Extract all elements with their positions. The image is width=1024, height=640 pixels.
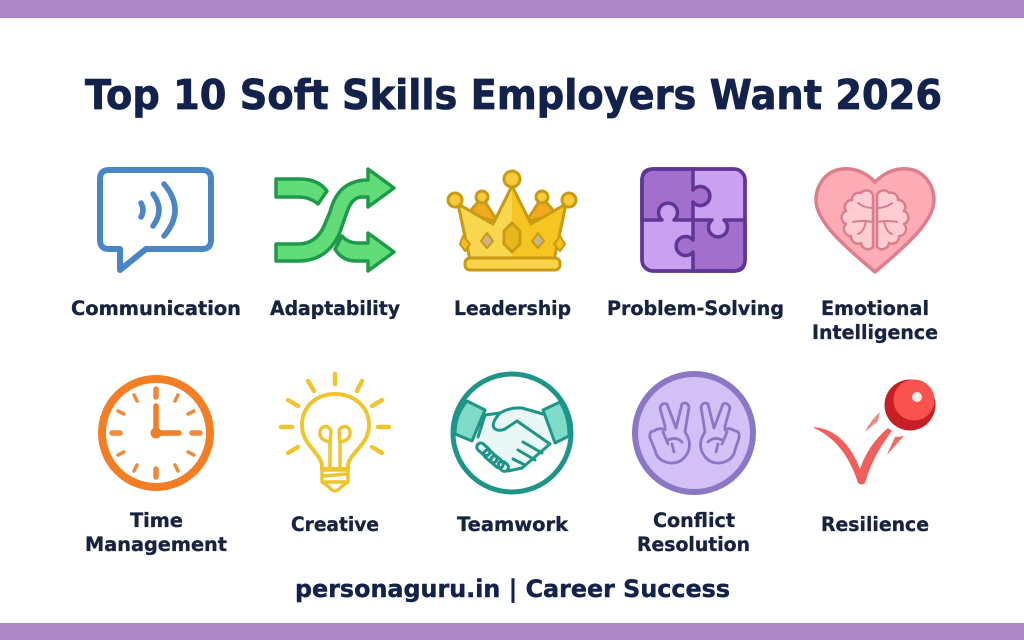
label: Creative: Creative xyxy=(291,513,379,536)
bottom band xyxy=(0,623,1024,640)
label: Conflict Resolution xyxy=(637,509,750,556)
icon: puzzle pieces xyxy=(642,169,745,271)
label: Emotional Intelligence: Emotional xyxy=(821,297,929,320)
label: Communication: Communication xyxy=(71,297,241,320)
label: Conflict Resolution: Resolution xyxy=(637,533,750,556)
icon: gold crown xyxy=(448,171,576,270)
label: Adaptability: Adaptability xyxy=(270,297,400,320)
icon: speech bubble with sound waves xyxy=(100,170,211,270)
label: Time Management: Time xyxy=(130,509,183,532)
label: Time Management: Management xyxy=(85,533,227,556)
footer: personaguru.in | Career Success xyxy=(295,575,730,603)
title: Top 10 Soft Skills Employers Want 2026 xyxy=(85,71,942,119)
icon: shuffle arrows xyxy=(276,169,394,271)
icon: peace signs badge xyxy=(635,374,753,492)
icon: heart with brain xyxy=(816,169,934,272)
label: Time Management xyxy=(85,509,227,556)
label: Problem-Solving: Problem-Solving xyxy=(607,297,784,320)
label: Emotional Intelligence: Intelligence xyxy=(812,321,938,344)
icon: handshake xyxy=(453,374,571,492)
icon: bouncing ball with check xyxy=(814,380,936,484)
top band xyxy=(0,0,1024,18)
label: Emotional Intelligence xyxy=(812,297,938,344)
label: Conflict Resolution: Conflict xyxy=(653,509,735,532)
label: Leadership: Leadership xyxy=(454,297,571,320)
label: Teamwork: Teamwork xyxy=(457,513,569,536)
label: Resilience: Resilience xyxy=(821,513,929,536)
icon: clock xyxy=(102,379,210,487)
icon: light bulb xyxy=(281,374,389,491)
